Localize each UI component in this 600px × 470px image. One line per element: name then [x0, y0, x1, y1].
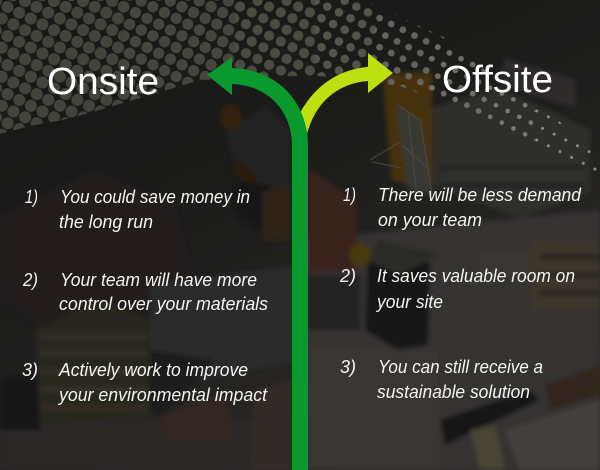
offsite point 1 [343, 184, 582, 230]
onsite point 2: Your team will have more [60, 269, 257, 290]
onsite point 2: 2) [22, 269, 38, 290]
halftone dot pattern [0, 0, 600, 180]
offsite point 3: sustainable solution [377, 381, 530, 402]
onsite point 1: 1) [25, 186, 38, 207]
list: onsite points [22, 186, 268, 405]
onsite point 1 [25, 186, 250, 232]
offsite point 2: 2) [339, 265, 356, 286]
onsite point 3: Actively work to improve [58, 359, 248, 380]
list: offsite points [339, 184, 582, 402]
offsite point 2 [339, 265, 575, 312]
offsite point 1: 1) [343, 184, 356, 205]
offsite point 2: your site [375, 291, 443, 312]
onsite point 3 [22, 359, 268, 405]
arrow: offsite, lime green pointing right [300, 53, 393, 134]
onsite point 1: the long run [59, 211, 153, 232]
offsite point 3 [340, 356, 543, 402]
offsite point 3: 3) [340, 356, 356, 377]
onsite point 2 [22, 269, 268, 314]
onsite point 1: You could save money in [60, 186, 250, 207]
heading: Offsite: Offsite [442, 59, 553, 101]
offsite point 3: You can still receive a [378, 356, 543, 377]
onsite point 2: control over your materials [59, 293, 268, 314]
offsite point 1: on your team [378, 209, 482, 230]
onsite point 3: your environmental impact [57, 384, 268, 405]
onsite point 3: 3) [22, 359, 38, 380]
arrow: onsite, green pointing left [207, 57, 308, 470]
offsite point 2: It saves valuable room on [377, 265, 575, 286]
offsite point 1: There will be less demand [378, 184, 582, 205]
heading: Onsite: Onsite [47, 61, 159, 103]
